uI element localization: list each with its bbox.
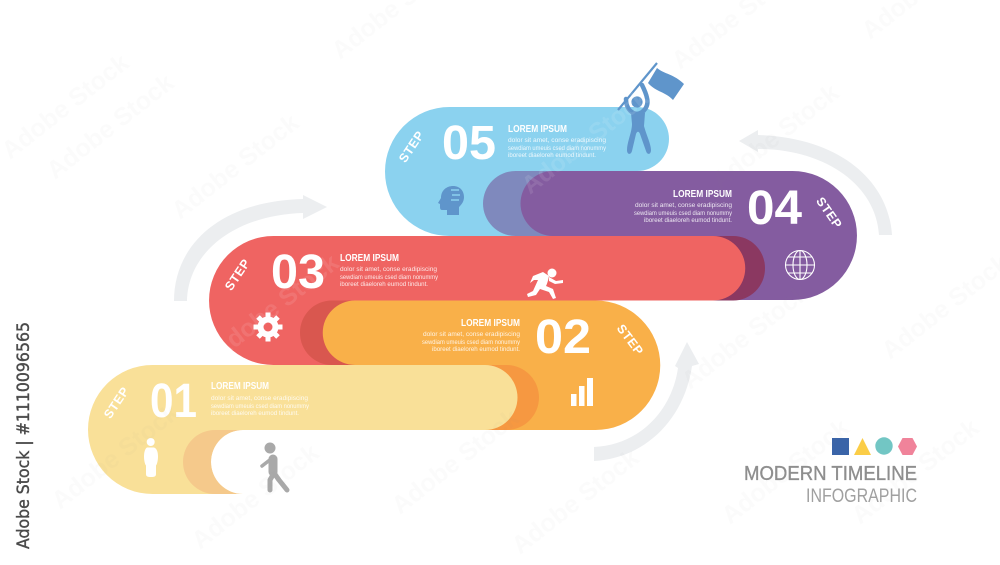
watermark: Adobe Stock bbox=[386, 404, 524, 520]
text block 05: dolor sit amet, conse eradipiscing bbox=[508, 137, 606, 144]
number 03: 03 bbox=[271, 246, 325, 299]
text block 02 bbox=[422, 331, 521, 353]
heading 02: LOREM IPSUM bbox=[461, 317, 520, 329]
text block 05 bbox=[508, 137, 607, 159]
text block 01: sewdiam umeuis csed diam nonummy bbox=[211, 403, 310, 410]
step label 02: STEP bbox=[614, 322, 646, 358]
text block 03 bbox=[340, 266, 439, 288]
number 05: 05 bbox=[442, 117, 496, 170]
panel: step 05 bbox=[385, 63, 684, 236]
text block 02: sewdiam umeuis csed diam nonummy bbox=[422, 339, 521, 346]
text block 01: dolor sit amet, conse eradipiscing bbox=[211, 395, 308, 402]
text block 01 bbox=[211, 395, 310, 417]
icon: standing person bbox=[144, 438, 158, 477]
heading 04: LOREM IPSUM bbox=[673, 188, 732, 200]
text block 02: iboreet diaeloreh eumod tindunt. bbox=[432, 346, 520, 353]
step label 03: STEP bbox=[222, 256, 253, 293]
crescent: orange-yellow overlap bbox=[420, 365, 539, 430]
icon: person holding flag bbox=[618, 63, 684, 154]
number 02: 02 bbox=[535, 311, 591, 364]
text block 04: iboreet diaeloreh eumod tindunt. bbox=[644, 217, 732, 224]
watermark: Adobe Stock bbox=[716, 414, 854, 530]
watermark: Adobe Stock bbox=[506, 444, 644, 560]
crescent: blue-purple overlap bbox=[483, 171, 603, 236]
icon: globe bbox=[786, 250, 814, 280]
heading 05: LOREM IPSUM bbox=[508, 123, 567, 135]
crescent: purple-red overlap bbox=[640, 236, 765, 300]
step label 05: STEP bbox=[396, 128, 427, 165]
watermark: Adobe Stock bbox=[206, 249, 344, 365]
text block 04: sewdiam umeuis csed diam nonummy bbox=[634, 210, 733, 217]
panel: step 02 bbox=[323, 300, 660, 430]
heading 03: LOREM IPSUM bbox=[340, 252, 399, 264]
watermark: Adobe Stock bbox=[516, 84, 654, 200]
panel: step 01 bbox=[88, 365, 517, 494]
panel: step 04 bbox=[520, 171, 857, 300]
arrow: curved from step 1 to step 2 bbox=[594, 342, 699, 461]
crescent: yellow-white overlap bbox=[183, 430, 243, 494]
text block 04: dolor sit amet, conse eradipiscing bbox=[635, 202, 732, 209]
icon: bar chart bbox=[571, 378, 593, 406]
text block 01: iboreet diaeloreh eumod tindunt. bbox=[211, 410, 299, 417]
text block 05: iboreet diaeloreh eumod tindunt. bbox=[508, 152, 596, 159]
crescent: red-orange overlap bbox=[300, 300, 430, 365]
heading 01: LOREM IPSUM bbox=[211, 380, 269, 392]
icon: gear bbox=[254, 312, 282, 342]
text block 04 bbox=[634, 202, 733, 224]
icon: running person bbox=[527, 268, 563, 299]
text block 02: dolor sit amet, conse eradipiscing bbox=[423, 331, 520, 338]
step label 04: STEP bbox=[813, 195, 845, 231]
step label 01: STEP bbox=[101, 384, 132, 421]
watermark: Adobe Stock bbox=[846, 414, 984, 530]
logo shapes bbox=[832, 437, 917, 455]
watermark: Adobe Stock bbox=[41, 69, 179, 185]
watermark: Adobe Stock bbox=[0, 49, 134, 165]
text block 03: iboreet diaeloreh eumod tindunt. bbox=[340, 281, 428, 288]
text block 05: sewdiam umeuis csed diam nonummy bbox=[508, 145, 607, 152]
number 04: 04 bbox=[747, 182, 802, 235]
text block 03: sewdiam umeuis csed diam nonummy bbox=[340, 274, 439, 281]
side credit: Adobe Stock | #1110096565 bbox=[14, 322, 34, 549]
logo title: MODERN TIMELINE bbox=[744, 463, 917, 485]
arrow: curved from step 3 to step 4 bbox=[739, 130, 892, 235]
icon: head with circuit bbox=[438, 186, 464, 215]
watermark: Adobe Stock bbox=[166, 109, 304, 225]
watermark: Adobe Stock bbox=[186, 439, 324, 555]
watermark: Adobe Stock bbox=[46, 399, 184, 515]
number 01: 01 bbox=[150, 375, 197, 428]
watermark: Adobe Stock bbox=[706, 79, 844, 195]
text block 03: dolor sit amet, conse eradipiscing bbox=[340, 266, 437, 273]
arrow: curved from step 2 to step 3 bbox=[174, 195, 327, 301]
panel: step 03 bbox=[209, 236, 745, 365]
icon: walking person bbox=[262, 442, 287, 490]
watermark: Adobe Stock bbox=[676, 279, 814, 395]
logo subtitle: INFOGRAPHIC bbox=[806, 485, 917, 507]
